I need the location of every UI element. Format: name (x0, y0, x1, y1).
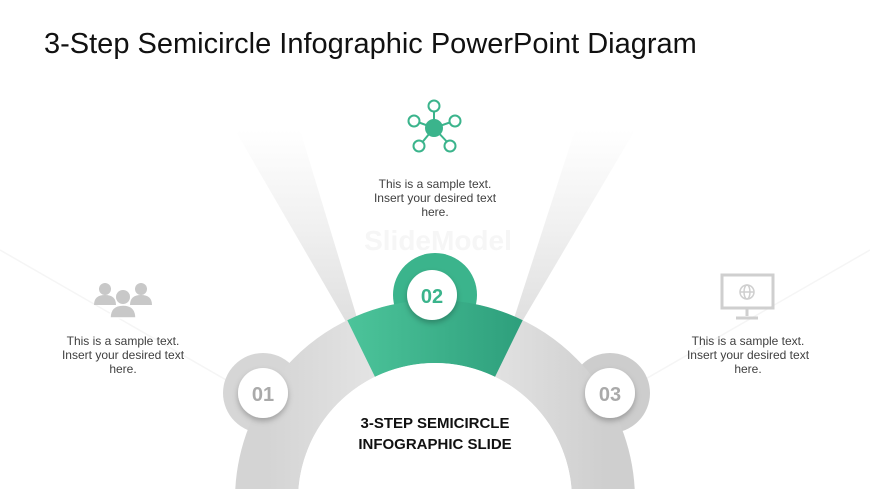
text 01 (62, 334, 184, 376)
text 02 (374, 177, 496, 219)
number 02: 02 (421, 286, 443, 308)
watermark: SlideModel (364, 225, 512, 256)
number 03 (585, 368, 635, 418)
center label: 3-STEP SEMICIRCLE (361, 415, 509, 432)
text 03 (687, 334, 809, 376)
faint rays (0, 250, 870, 489)
text 03: Insert your desired text (687, 348, 809, 362)
diagram: INFOGRAPHIC SLIDE (358, 436, 512, 453)
text 01: here. (109, 362, 137, 376)
text 02: here. (421, 205, 449, 219)
tab 01 (223, 353, 303, 433)
text 01: This is a sample text. (67, 334, 179, 348)
number 01: 01 (252, 384, 274, 406)
beams (235, 130, 635, 377)
text 02: Insert your desired text (374, 191, 496, 205)
number 01 (238, 368, 288, 418)
text 02: This is a sample text. (379, 177, 491, 191)
tab 03 (570, 353, 650, 433)
icon: monitor (722, 275, 773, 318)
number 02 (407, 270, 457, 320)
text 01: Insert your desired text (62, 348, 184, 362)
number 03: 03 (599, 384, 621, 406)
green segment (347, 253, 523, 377)
text 03: This is a sample text. (692, 334, 804, 348)
icon: people (94, 283, 152, 318)
inner white (298, 363, 572, 489)
gray ring (266, 332, 604, 489)
text 03: here. (734, 362, 762, 376)
icon: network (408, 100, 460, 152)
title: 3-Step Semicircle Infographic PowerPoint Diagram (44, 28, 697, 60)
